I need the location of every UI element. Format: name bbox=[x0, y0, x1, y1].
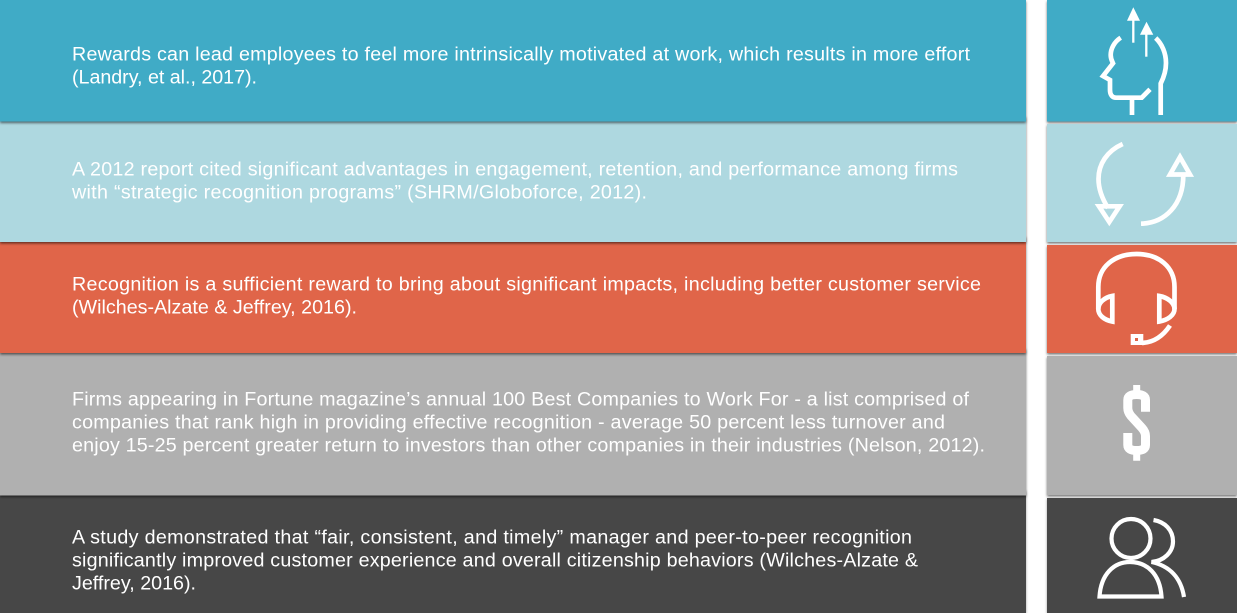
icon tile: gray bbox=[1047, 356, 1237, 495]
panel: citizenship bbox=[0, 490, 1026, 613]
icon: people bbox=[1100, 519, 1184, 597]
text: motivation: (Landry, et al., 2017). bbox=[72, 66, 257, 88]
panel: motivation bbox=[0, 0, 1026, 122]
band: motivation bbox=[0, 0, 1026, 122]
panel: customer service bbox=[0, 236, 1026, 353]
panel: turnover and returns bbox=[0, 348, 1026, 496]
text: engagement bbox=[71, 158, 958, 204]
text: turnover and returns: companies that rank high in providing effective recognition - average 50 percent less turnover and bbox=[72, 412, 945, 434]
icon: headset bbox=[1098, 254, 1174, 345]
band: citizenship bbox=[0, 490, 1026, 613]
panel: engagement bbox=[0, 116, 1026, 242]
text: citizenship bbox=[72, 526, 918, 594]
text: customer service bbox=[72, 274, 981, 318]
icon: head with rising arrows bbox=[1103, 7, 1166, 115]
band: engagement bbox=[0, 116, 1026, 242]
icon tile: light blue bbox=[1047, 124, 1237, 242]
text: citizenship: A study demonstrated that “fair, consistent, and timely” manager and peer-to-peer recognition bbox=[72, 526, 912, 548]
icon tile: dark bbox=[1047, 498, 1237, 613]
text: turnover and returns: enjoy 15-25 percent greater return to investors than other companies in their industries (Nelson, 2012). bbox=[72, 434, 985, 456]
text: turnover and returns: Firms appearing in Fortune magazine’s annual 100 Best Companies to Work For - a list comprised of bbox=[72, 388, 970, 410]
icon: dollar sign bbox=[1128, 385, 1146, 461]
band: customer service bbox=[0, 236, 1026, 353]
text: citizenship: Jeffrey, 2016). bbox=[72, 572, 196, 594]
icon tile: blue bbox=[1047, 0, 1237, 122]
text: customer service: Recognition is a sufficient reward to bring about significant impacts, including better customer service bbox=[72, 274, 981, 296]
text: engagement: A 2012 report cited significant advantages in engagement, retention, and performance among firms bbox=[72, 158, 958, 180]
text: engagement: with “strategic recognition programs” (SHRM/Globoforce, 2012). bbox=[71, 182, 647, 204]
icon: circular arrows bbox=[1098, 144, 1190, 224]
text: turnover and returns bbox=[72, 388, 985, 456]
text: motivation bbox=[72, 44, 971, 88]
text: customer service: (Wilches-Alzate & Jeffrey, 2016). bbox=[72, 296, 357, 318]
text: motivation: Rewards can lead employees to feel more intrinsically motivated at work, which results in more effort bbox=[72, 44, 971, 66]
text: citizenship: significantly improved customer experience and overall citizenship behaviors (Wilches-Alzate & bbox=[72, 550, 918, 572]
icon tile: orange bbox=[1047, 245, 1237, 353]
band: turnover and returns bbox=[0, 348, 1026, 496]
